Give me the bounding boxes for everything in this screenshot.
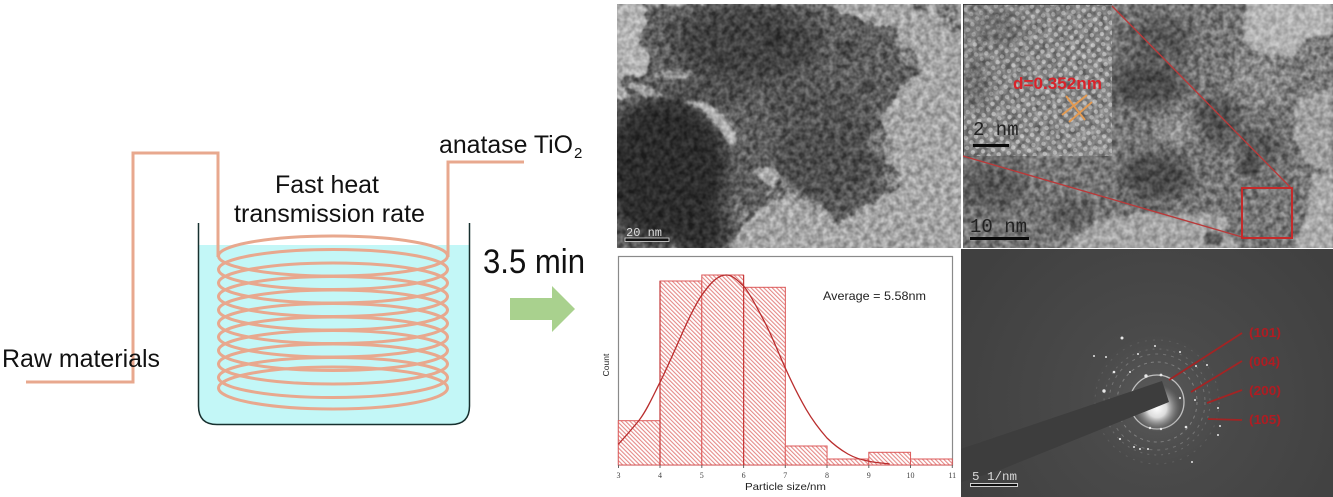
miller index labels: (101) <box>1249 325 1281 340</box>
average annotation: Average = 5.58nm <box>823 289 926 303</box>
histogram bars <box>618 275 952 465</box>
x axis tick labels: 6 <box>742 471 746 480</box>
inlet tube <box>26 153 218 382</box>
inset border <box>963 4 1112 156</box>
beaker water <box>199 245 469 424</box>
plot frame <box>618 256 952 465</box>
label: fast heat transmission rate: Fast heat <box>275 171 379 199</box>
x axis tick labels: 10 <box>906 471 914 480</box>
miller index leader lines <box>1169 333 1242 420</box>
micrograph grain <box>617 4 961 248</box>
miller index labels <box>1249 325 1281 427</box>
x axis tick labels: 5 <box>700 471 704 480</box>
label: fast heat transmission rate <box>234 171 425 228</box>
scale bar: 10 nm: 10 nm <box>970 216 1027 238</box>
panel: TEM image low magnification <box>617 4 961 248</box>
micrograph <box>617 4 961 248</box>
panel: particle size histogram <box>601 256 956 493</box>
central glow <box>1136 388 1178 430</box>
panel: electron diffraction pattern <box>961 249 1333 497</box>
label: anatase TiO2: 2 <box>574 145 582 162</box>
micrograph grain <box>963 4 1333 248</box>
d-spacing label: d=0.352nm <box>1013 74 1102 93</box>
x axis title: Particle size/nm <box>745 481 826 493</box>
diffraction background <box>961 249 1333 497</box>
coiled tube <box>218 236 448 409</box>
arrow <box>510 286 575 332</box>
diffraction rings <box>1095 340 1219 464</box>
x axis tick labels: 11 <box>948 471 956 480</box>
x axis tick labels: 7 <box>783 471 787 480</box>
x axis tick labels <box>616 471 956 480</box>
panel: reactor schematic <box>2 131 585 424</box>
scale bar: 2 nm: 2 nm <box>973 119 1019 141</box>
bar edges <box>660 275 744 465</box>
x axis tick labels: 4 <box>658 471 662 480</box>
zoom guide lines <box>963 6 1291 237</box>
miller index labels: (200) <box>1249 383 1281 398</box>
x axis tick labels: 3 <box>616 471 620 480</box>
miller index labels: (004) <box>1249 354 1280 369</box>
selected region box <box>1242 188 1292 238</box>
outlet tube <box>448 162 524 257</box>
label: raw materials: Raw materials <box>2 345 160 373</box>
scale bar: 20 nm: 20 nm <box>626 226 662 240</box>
x axis ticks <box>618 465 952 468</box>
scale bar: 2 nm <box>973 122 1018 147</box>
micrograph <box>960 0 1333 250</box>
inset lattice image <box>961 4 1112 156</box>
gaussian fit curve <box>618 275 890 464</box>
panel: HRTEM image with inset <box>960 0 1333 250</box>
diffraction spots <box>1093 336 1221 463</box>
lattice fringe marks <box>1062 95 1092 122</box>
scale bar: 5 1/nm: 5 1/nm <box>972 470 1017 484</box>
miller index labels: (105) <box>1249 412 1281 427</box>
x axis tick labels: 8 <box>825 471 829 480</box>
label: reaction time: 3.5 min <box>483 243 585 281</box>
beam stopper <box>1012 381 1169 458</box>
label: fast heat transmission rate: transmission rate <box>234 200 425 228</box>
label: anatase TiO2: anatase TiO <box>439 131 573 159</box>
x axis tick labels: 9 <box>867 471 871 480</box>
y axis title: Count <box>601 353 611 376</box>
beaker outline <box>198 223 470 424</box>
